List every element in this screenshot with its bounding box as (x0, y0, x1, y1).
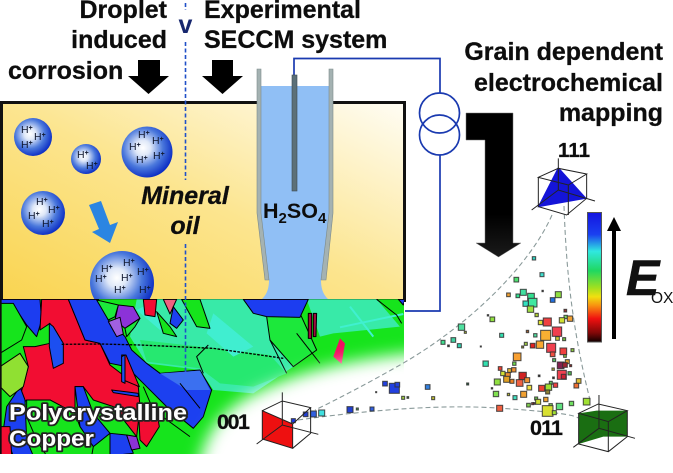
label: Mineral oil (141, 182, 230, 240)
crystal cube 001 (257, 392, 318, 448)
droplet 5 on copper: + (147, 285, 151, 292)
label: Mineral oil: oil (170, 212, 201, 240)
electrode (292, 75, 297, 191)
heading: Experimental SECCM system (204, 0, 387, 54)
caption: Polycrystalline Copper: Copper (9, 426, 94, 451)
heading: Grain dependent electrochemical mapping: mapping (559, 99, 663, 127)
droplet 5 on copper: + (122, 285, 126, 292)
droplet 5 on copper: H (95, 273, 103, 285)
dashed triangle boundary (298, 206, 590, 420)
circuit wire (294, 58, 440, 311)
droplet 2: + (94, 161, 98, 168)
droplet 3: + (137, 142, 141, 149)
droplet 4: H (28, 210, 36, 222)
SECCM capillary (257, 69, 333, 299)
droplet 2: + (85, 150, 89, 157)
droplet 4: + (56, 205, 60, 212)
label: 011: 011 (530, 416, 563, 440)
heading: Droplet induced corrosion (8, 0, 168, 85)
droplet 3: H (129, 141, 137, 153)
droplet 5 on copper: + (145, 267, 149, 274)
droplet 5 on copper: H (101, 263, 109, 275)
droplet 4: + (50, 219, 54, 226)
heading: Experimental SECCM system: SECCM system (204, 26, 387, 54)
droplet 2: H (86, 160, 94, 172)
droplet 4: + (36, 211, 40, 218)
droplet 1: H (21, 124, 29, 136)
label: E ox (626, 250, 673, 307)
panel: polycrystalline copper grain map (0, 299, 404, 454)
arrow: increasing Eox (607, 217, 621, 339)
crystal cube 011 (573, 395, 635, 452)
arrow: droplet motion (89, 201, 118, 243)
droplet 1: + (29, 140, 33, 147)
droplet 5 on copper: H (114, 284, 122, 296)
droplet 4: H (48, 204, 56, 216)
caption: Polycrystalline Copper (9, 400, 187, 451)
label: H2SO4: H (263, 199, 279, 223)
droplet 3: H (138, 129, 146, 141)
droplet 4: + (44, 197, 48, 204)
droplet 3: + (144, 155, 148, 162)
droplet 5 on copper: H (137, 266, 145, 278)
droplet 5 on copper: H (121, 272, 129, 284)
left glass wall (257, 69, 269, 280)
droplet 3 (122, 126, 172, 178)
droplet 3: H (152, 135, 160, 147)
heading: Droplet induced corrosion: induced (71, 26, 167, 54)
droplet 4: H (36, 196, 44, 208)
droplet 5 on copper: H (123, 257, 131, 269)
crystal cube 111 (532, 158, 595, 215)
icon: current source (420, 93, 460, 155)
droplet 3: + (161, 151, 165, 158)
droplet 4 (21, 191, 65, 235)
droplet 3: + (160, 136, 164, 143)
scatter of electrochemical map points (291, 257, 590, 423)
droplet 2 (71, 144, 101, 174)
droplet 5 on copper: + (103, 274, 107, 281)
droplet 3: H (136, 154, 144, 166)
arrow: to electrochemical map (466, 113, 521, 257)
label: E ox: OX (651, 290, 673, 307)
arrow: SECCM system (202, 60, 243, 94)
caption: Polycrystalline Copper: Polycrystalline (9, 400, 187, 425)
droplet 5 on copper (90, 251, 154, 299)
label: H2SO4: SO (287, 199, 318, 223)
divider: dashed vertical line with V: v (179, 11, 193, 39)
droplet 5 on copper: + (109, 264, 113, 271)
droplet 5 on copper: + (129, 273, 133, 280)
droplet 5 on copper: + (131, 258, 135, 265)
label: H2SO4: 2 (279, 210, 287, 227)
droplet 3: + (146, 130, 150, 137)
heading: Droplet induced corrosion: corrosion (8, 57, 123, 85)
label: 111: 111 (558, 139, 590, 162)
label: 001: 001 (217, 410, 250, 434)
label: H2SO4: 4 (318, 210, 327, 227)
heading: Grain dependent electrochemical mapping: electrochemical (474, 69, 663, 97)
droplet 2: H (77, 149, 85, 161)
H+ droplets in oil (14, 118, 172, 315)
electrolyte (261, 86, 329, 299)
droplet 1: H (21, 139, 29, 151)
arrow: droplet corrosion (128, 60, 169, 94)
droplet 1: + (29, 125, 33, 132)
heading: Grain dependent electrochemical mapping: Grain dependent (464, 38, 664, 66)
droplet 4: H (42, 218, 50, 230)
droplet 3: H (153, 150, 161, 162)
heading: Grain dependent electrochemical mapping (464, 38, 664, 127)
label: Mineral oil: Mineral (141, 182, 230, 210)
droplet 1: + (42, 132, 46, 139)
droplet 1: H (34, 131, 42, 143)
panel: mineral oil bath (2, 102, 404, 300)
droplet 5 on copper: H (139, 284, 147, 296)
right glass wall (321, 69, 333, 280)
droplet 1 (14, 118, 52, 156)
fade to white corner (188, 340, 404, 454)
colour scale bar (588, 212, 602, 342)
label: E ox: E (626, 250, 661, 306)
